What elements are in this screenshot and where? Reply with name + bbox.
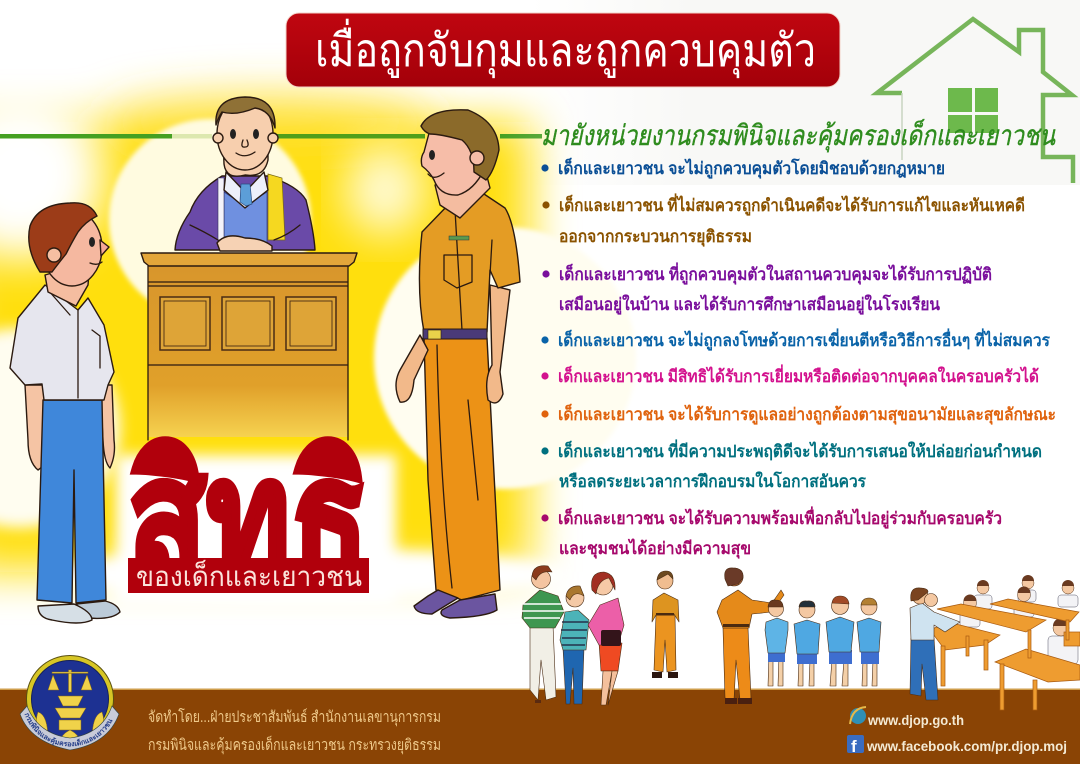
son	[560, 586, 589, 704]
seal ribbon	[20, 706, 119, 750]
icon: facebook	[847, 735, 864, 756]
facebook link: www.facebook.com/pr.djop.moj	[866, 739, 1067, 754]
small figures: classroom	[910, 575, 1080, 710]
icon: facebook: f	[851, 737, 857, 756]
mother	[588, 572, 624, 705]
desks	[930, 599, 1080, 710]
boy: shirt	[10, 285, 114, 400]
window	[948, 88, 998, 133]
small figures: instructor	[717, 568, 784, 704]
boy 2	[794, 601, 820, 686]
illustration: boy	[10, 203, 120, 623]
right 2: เด็กและเยาวชน ที่ไม่สมควรถูกดำเนินคดีจะได้รับการแก้ไขและหันเหคดี	[559, 193, 1025, 217]
rights list	[541, 157, 1056, 559]
boy: shoes	[76, 601, 120, 618]
boy: head	[45, 262, 90, 306]
facebook link	[847, 735, 1067, 756]
web link: www.djop.go.th	[867, 713, 964, 728]
background glow: yellow with white circles	[0, 90, 636, 605]
right 3: เสมือนอยู่ในบ้าน และได้รับการศึกษาเสมือนอยู่ในโรงเรียน	[559, 294, 940, 316]
footer credit text: กรมพินิจและคุ้มครองเด็กและเยาวชน กระทรวงยุติธรรม	[148, 735, 441, 755]
right 3: เด็กและเยาวชน ที่ถูกควบคุมตัวในสถานควบคุมจะได้รับการปฏิบัติ	[559, 262, 992, 286]
illustration: podium	[141, 253, 357, 440]
right 2	[542, 193, 1025, 247]
web link	[850, 707, 964, 728]
officer: belt	[423, 329, 487, 339]
boy 3	[826, 596, 854, 686]
title banner	[286, 13, 840, 87]
right 8: และชุมชนได้อย่างมีความสุข	[559, 538, 751, 559]
right 3	[542, 262, 992, 316]
officer: hands and forearms	[487, 285, 510, 403]
teacher in class	[910, 588, 960, 700]
right 7: เด็กและเยาวชน ที่มีความประพฤติดีจะได้รับการเสนอให้ปล่อยก่อนกำหนด	[558, 439, 1042, 461]
right 5: เด็กและเยาวชน มีสิทธิได้รับการเยี่ยมหรือติดต่อจากบุคคลในครอบครัวได้	[558, 364, 1039, 387]
right 1: เด็กและเยาวชน จะไม่ถูกควบคุมตัวโดยมิชอบด้วยกฎหมาย	[558, 157, 945, 180]
logotype halo	[116, 455, 396, 605]
illustration: judge at podium	[175, 97, 315, 251]
boy 1	[765, 600, 788, 686]
small figures: officer	[652, 571, 679, 678]
right 6: เด็กและเยาวชน จะได้รับการดูแลอย่างถูกต้องตามสุขอนามัยและสุขลักษณะ	[558, 403, 1056, 426]
right 4: เด็กและเยาวชน จะไม่ถูกลงโทษด้วยการเฆี่ยนตีหรือวิธีการอื่นๆ ที่ไม่สมควร	[558, 328, 1050, 352]
small figures: four boys	[765, 596, 881, 686]
boy 4	[857, 598, 881, 686]
small figures: family	[522, 566, 624, 705]
officer: shirt	[419, 190, 520, 332]
footer credit text	[148, 708, 441, 755]
right 7	[541, 439, 1042, 491]
father	[522, 566, 564, 703]
illustration: officer	[396, 110, 520, 618]
sub word: ของเด็กและเยาวชน	[136, 559, 362, 592]
icon: web browser	[850, 707, 866, 724]
right 7: หรือลดระยะเวลาการฝึกอบรมในโอกาสอันควร	[559, 471, 866, 491]
rights logotype	[128, 425, 369, 617]
boy: jeans	[37, 400, 106, 603]
title banner: เมื่อถูกจับกุมและถูกควบคุมตัว	[315, 18, 816, 79]
house outline icon	[877, 19, 1073, 183]
officer: shoes	[414, 590, 458, 614]
big word: สิทธิ	[128, 425, 369, 617]
right 8	[541, 506, 1002, 559]
footer band	[0, 688, 1080, 764]
logo seal	[20, 655, 120, 750]
footer credit text: จัดทำโดย...ฝ่ายประชาสัมพันธ์ สำนักงานเลขานุการกรม	[148, 708, 441, 727]
right 2: ออกจากกระบวนการยุติธรรม	[559, 227, 752, 247]
logo seal: กรมพินิจและคุ้มครองเด็กและเยาวชน	[24, 713, 112, 746]
boy: arms	[25, 385, 52, 470]
officer: head	[435, 165, 490, 218]
green baseline rule, visible segments	[0, 134, 542, 138]
students	[960, 590, 1078, 664]
officer: trousers	[424, 338, 500, 600]
right 8: เด็กและเยาวชน จะได้รับความพร้อมเพื่อกลับไปอยู่ร่วมกับครอบครัว	[558, 506, 1002, 530]
